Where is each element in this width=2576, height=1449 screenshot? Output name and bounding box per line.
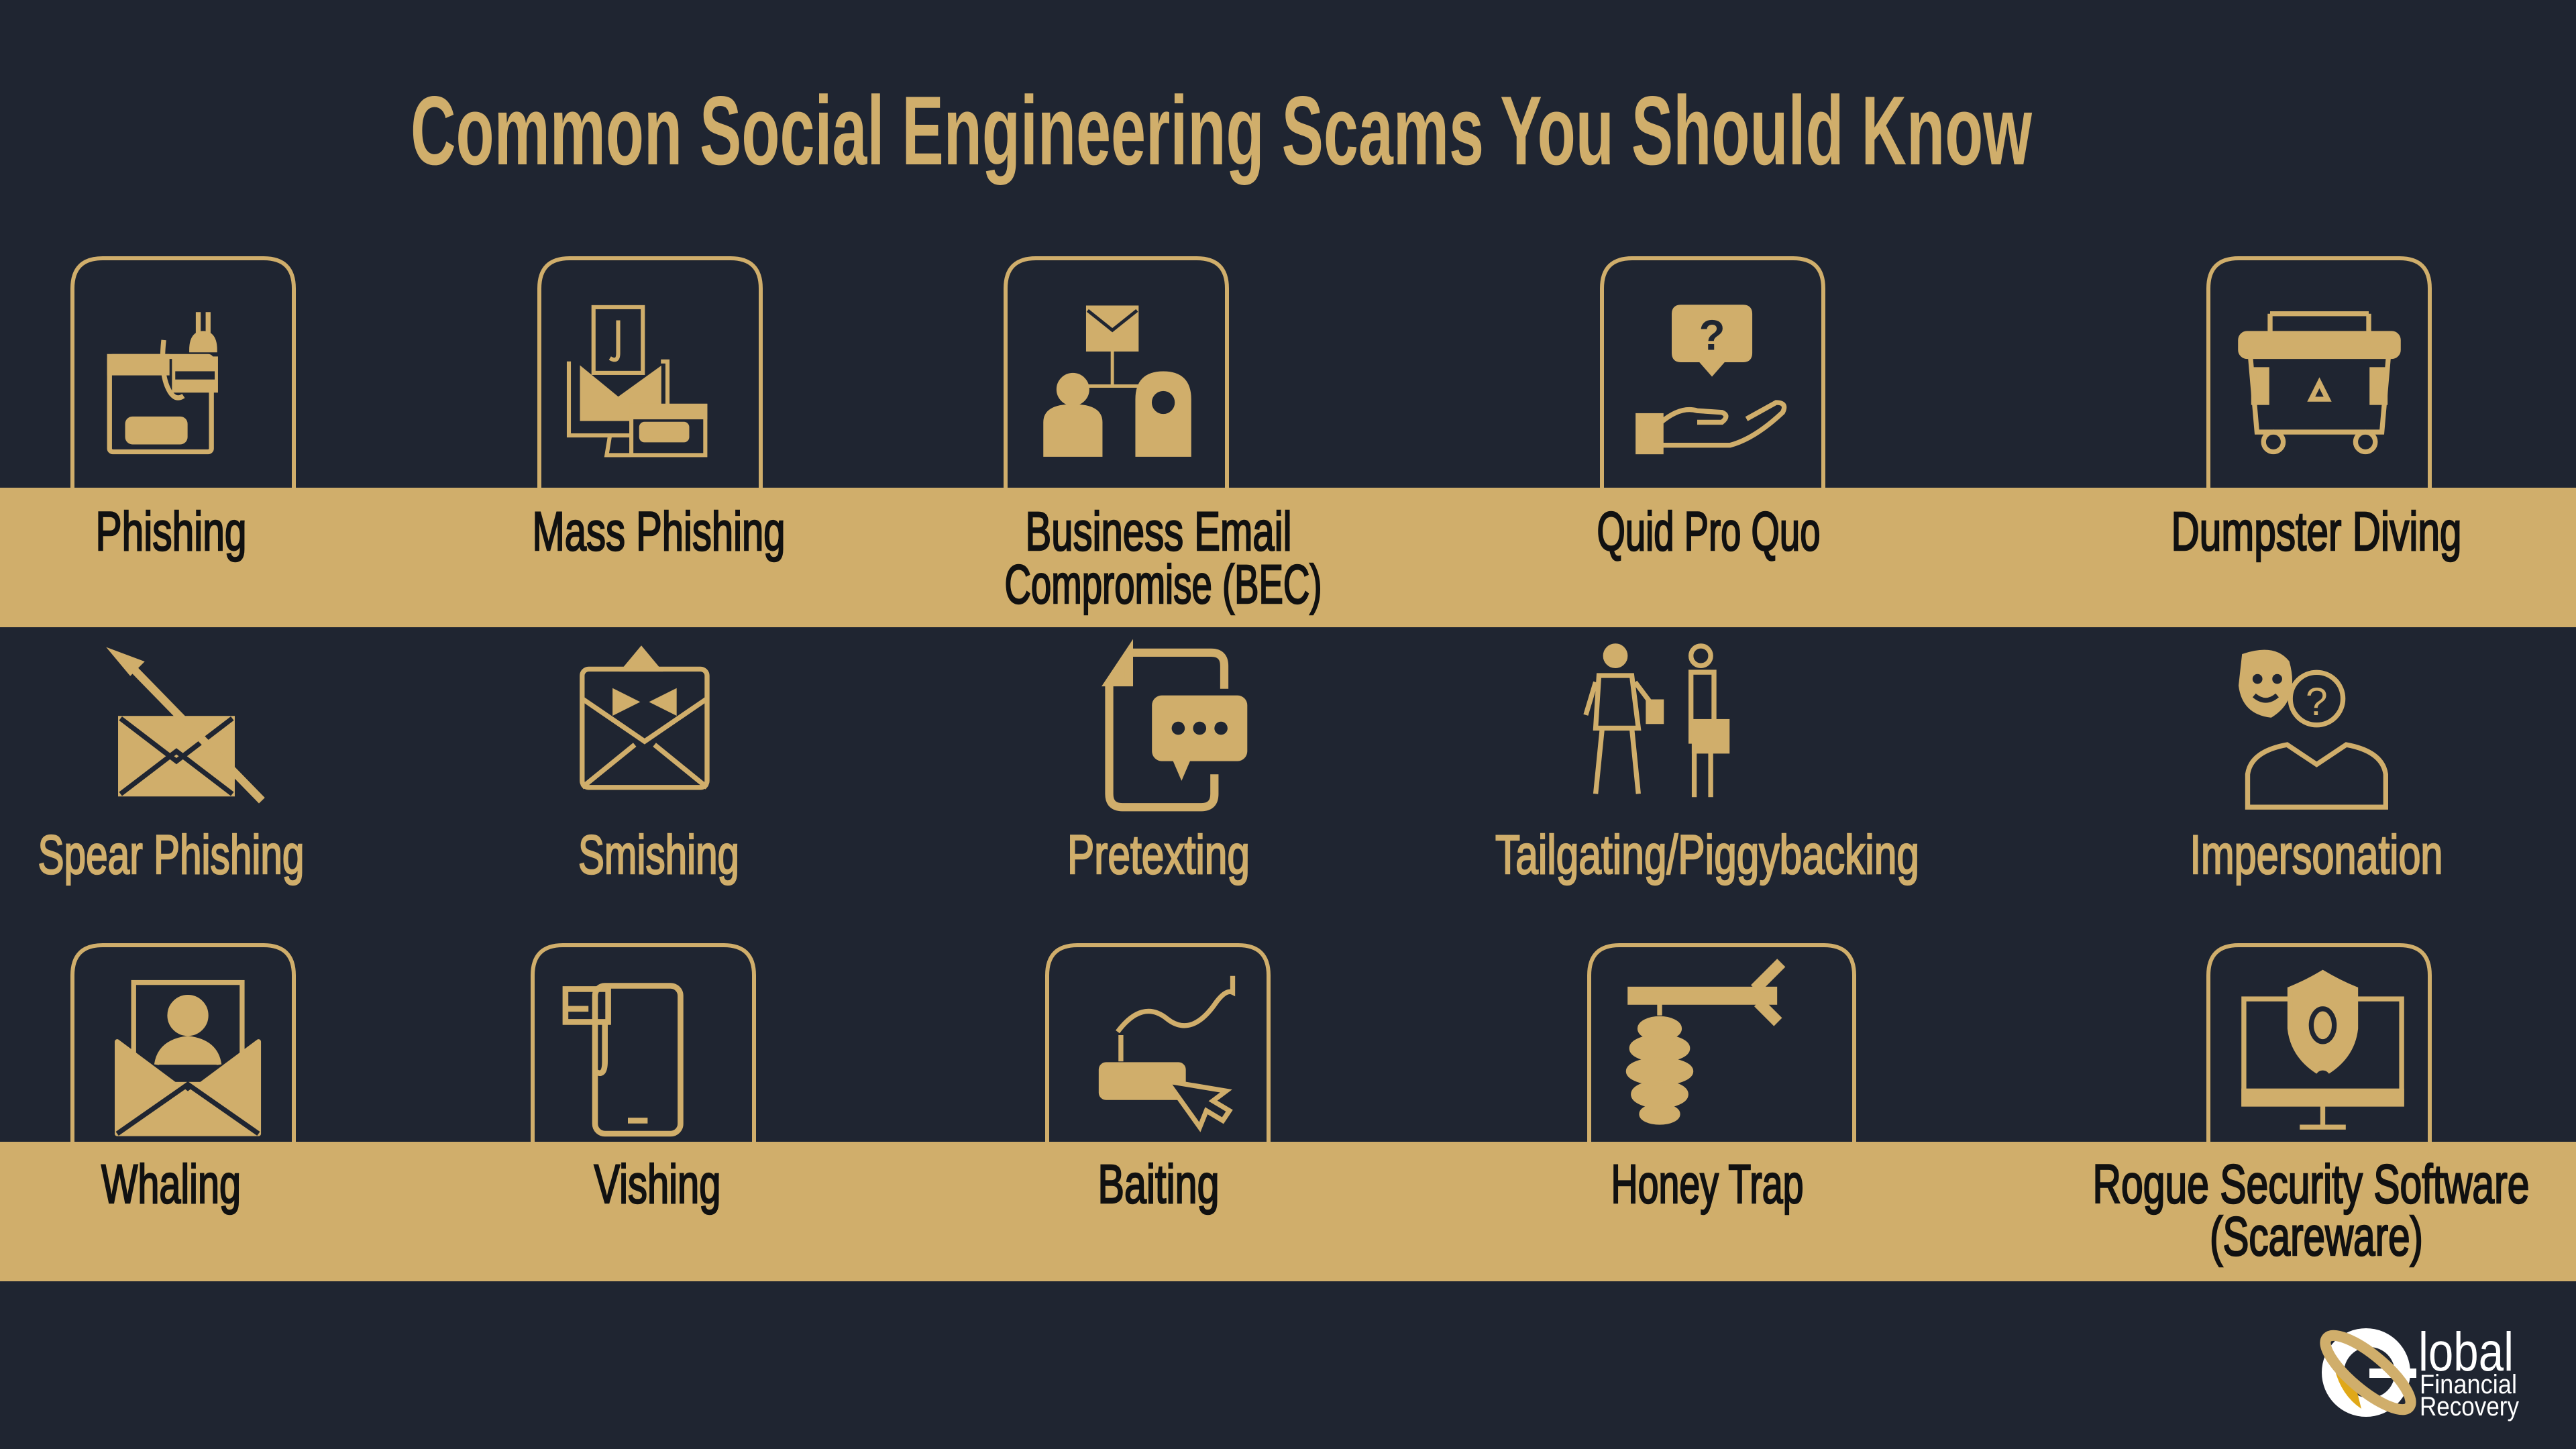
labels row 3: Baiting <box>1097 1154 1220 1215</box>
icon: scareware <box>2244 973 2402 1127</box>
labels row 1: Phishing <box>95 501 247 562</box>
labels row 1: Compromise (BEC) <box>1005 554 1322 615</box>
logo <box>2316 1322 2519 1421</box>
labels row 1: Quid Pro Quo <box>1597 501 1821 562</box>
icon: phishing <box>109 312 218 452</box>
icon: honey trap <box>1628 963 1781 1122</box>
labels row 2 <box>38 824 2443 885</box>
labels row 1: Mass Phishing <box>533 501 785 562</box>
icon: tailgating <box>1586 646 1727 797</box>
icon: dumpster <box>2241 314 2398 452</box>
logo: Recovery <box>2420 1392 2519 1421</box>
icon: smishing <box>582 649 707 788</box>
icon: quid pro quo: ? <box>1699 312 1725 360</box>
icon: pretexting <box>1110 653 1247 807</box>
icon: whaling <box>117 983 258 1134</box>
icon boxes row 1 <box>72 258 2430 488</box>
labels row 2: Tailgating/Piggybacking <box>1495 824 1919 885</box>
icon: impersonation <box>2241 652 2385 807</box>
labels row 3 <box>101 1154 2529 1267</box>
logo: Financial <box>2420 1370 2517 1399</box>
labels row 1 <box>95 501 2462 615</box>
labels row 2: Smishing <box>578 824 739 885</box>
icon: BEC <box>1045 307 1189 455</box>
icon: quid pro quo <box>1638 307 1784 452</box>
icon: impersonation: ? <box>2306 680 2328 724</box>
logo: lobal <box>2418 1322 2514 1383</box>
icon: spear phishing <box>114 653 262 800</box>
icon: baiting <box>1102 976 1233 1127</box>
labels row 3: Honey Trap <box>1611 1154 1803 1215</box>
icon: mass phishing <box>569 307 705 455</box>
band: row 3 <box>0 1142 2576 1281</box>
band: row 1 <box>0 488 2576 627</box>
labels row 3: (Scareware) <box>2210 1206 2423 1267</box>
labels row 2: Spear Phishing <box>38 824 305 885</box>
icon: vishing <box>566 986 680 1134</box>
labels row 2: Impersonation <box>2190 824 2443 885</box>
labels row 3: Vishing <box>594 1154 720 1215</box>
labels row 3: Whaling <box>101 1154 241 1215</box>
labels row 1: Business Email <box>1025 501 1292 562</box>
icon boxes row 3 <box>72 945 2430 1142</box>
labels row 2: Pretexting <box>1067 824 1250 885</box>
labels row 1: Dumpster Diving <box>2171 501 2462 562</box>
